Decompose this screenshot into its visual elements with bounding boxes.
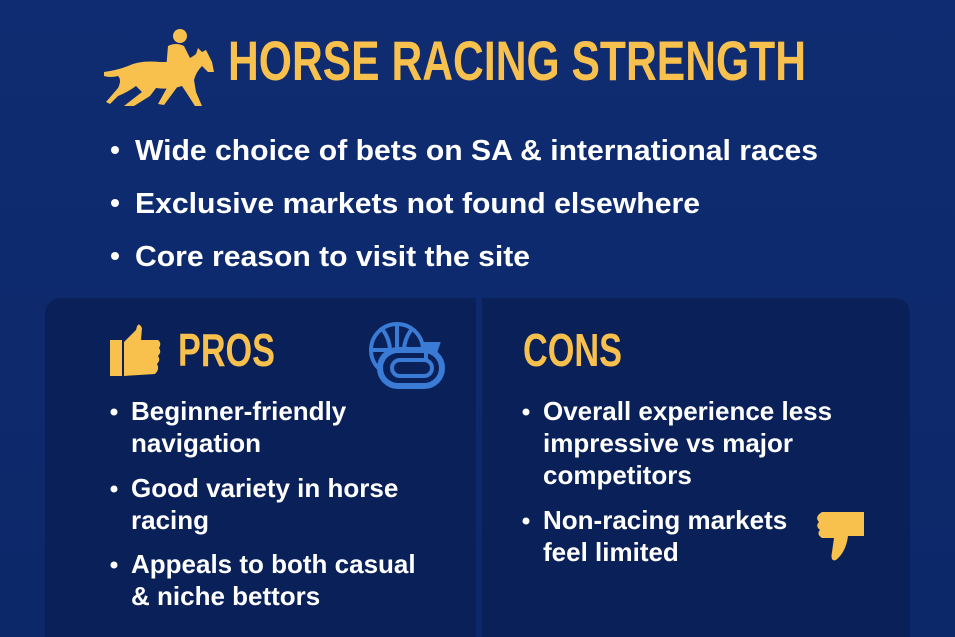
- list: cons: [522, 396, 832, 567]
- list: cons: competitors: [543, 460, 692, 490]
- list: pros: Beginner-friendly: [131, 396, 347, 426]
- list: pros: Good variety in horse: [131, 473, 398, 503]
- icon: thumbs down: [817, 512, 864, 560]
- list: cons: Overall experience less: [543, 396, 832, 426]
- list: cons: impressive vs major: [543, 428, 793, 458]
- bullets: strengths: Core reason to visit the site: [135, 241, 530, 273]
- list: pros: Appeals to both casual: [131, 549, 416, 579]
- icon: globe racetrack: [371, 324, 442, 386]
- list: cons: feel limited: [543, 537, 679, 567]
- bullets: strengths: Exclusive markets not found elsewhere: [135, 188, 700, 220]
- panel: pros: [45, 298, 476, 637]
- icon: horse and jockey: [104, 29, 214, 106]
- panel: cons: [482, 298, 910, 637]
- bullets: strengths: Wide choice of bets on SA & international races: [135, 135, 818, 167]
- heading: cons: CONS: [523, 324, 622, 376]
- heading: pros: PROS: [178, 324, 275, 376]
- list: cons: Non-racing markets: [543, 505, 787, 535]
- list: pros: racing: [131, 505, 209, 535]
- list: pros: [110, 396, 416, 611]
- bullets: strengths: [111, 135, 818, 273]
- list: pros: navigation: [131, 428, 261, 458]
- list: pros: & niche bettors: [131, 581, 320, 611]
- icon: thumbs up: [110, 324, 160, 376]
